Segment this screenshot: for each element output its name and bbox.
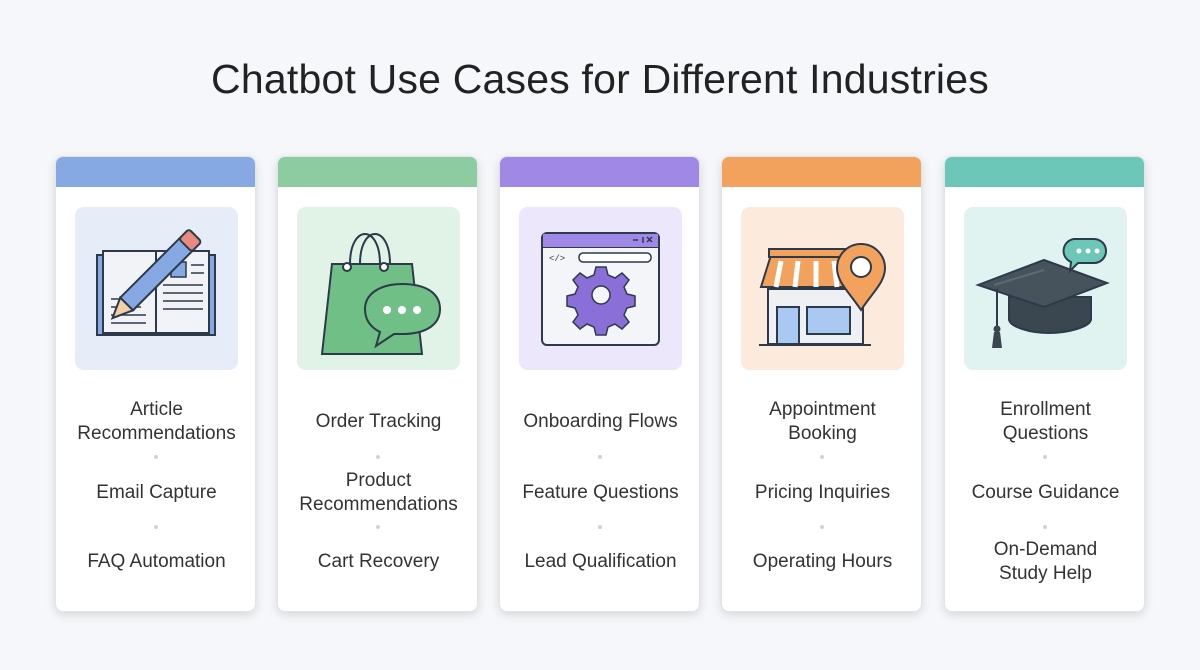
icon: book and pencil: [75, 207, 238, 370]
text: local business use cases: Booking: [788, 423, 857, 444]
text: education use cases: Enrollment: [1000, 399, 1091, 420]
text: saas use cases: Lead Qualification: [524, 551, 677, 572]
text: publishing use cases: [77, 399, 236, 572]
text: local business use cases: [753, 399, 892, 572]
text: publishing use cases: Email Capture: [96, 482, 217, 503]
text: publishing use cases: FAQ Automation: [87, 551, 226, 572]
text: local business use cases: Pricing Inquiries: [755, 482, 890, 503]
icon: graduation cap with chat: [964, 207, 1127, 370]
icon: storefront with pin: [741, 207, 904, 370]
text: education use cases: Study Help: [999, 563, 1092, 584]
text: education use cases: Course Guidance: [972, 482, 1119, 503]
text: ecommerce use cases: Product: [346, 470, 411, 491]
title: Chatbot Use Cases for Different Industries: [211, 56, 989, 102]
panel: education: [944, 156, 1145, 612]
text: saas use cases: Onboarding Flows: [523, 411, 678, 432]
text: ecommerce use cases: Cart Recovery: [318, 551, 439, 572]
panel: saas: [499, 156, 700, 612]
icon: browser with gear: [519, 207, 682, 370]
text: publishing use cases: Recommendations: [77, 423, 236, 444]
text: ecommerce use cases: Recommendations: [299, 494, 458, 515]
text: saas use cases: [522, 411, 679, 572]
text: ecommerce use cases: Order Tracking: [316, 411, 441, 432]
panel: ecommerce: [277, 156, 478, 612]
text: education use cases: Questions: [1003, 423, 1088, 444]
panel: local business: [721, 156, 922, 612]
text: local business use cases: Operating Hours: [753, 551, 892, 572]
text: local business use cases: Appointment: [769, 399, 876, 420]
icon: browser with gear: </>: [549, 254, 565, 264]
text: ecommerce use cases: [299, 411, 458, 572]
text: education use cases: [972, 399, 1119, 584]
text: saas use cases: Feature Questions: [522, 482, 679, 503]
panel: publishing: [55, 156, 256, 612]
text: education use cases: On-Demand: [994, 539, 1097, 560]
text: publishing use cases: Article: [130, 399, 183, 420]
icon: shopping bag with chat: [297, 207, 460, 370]
